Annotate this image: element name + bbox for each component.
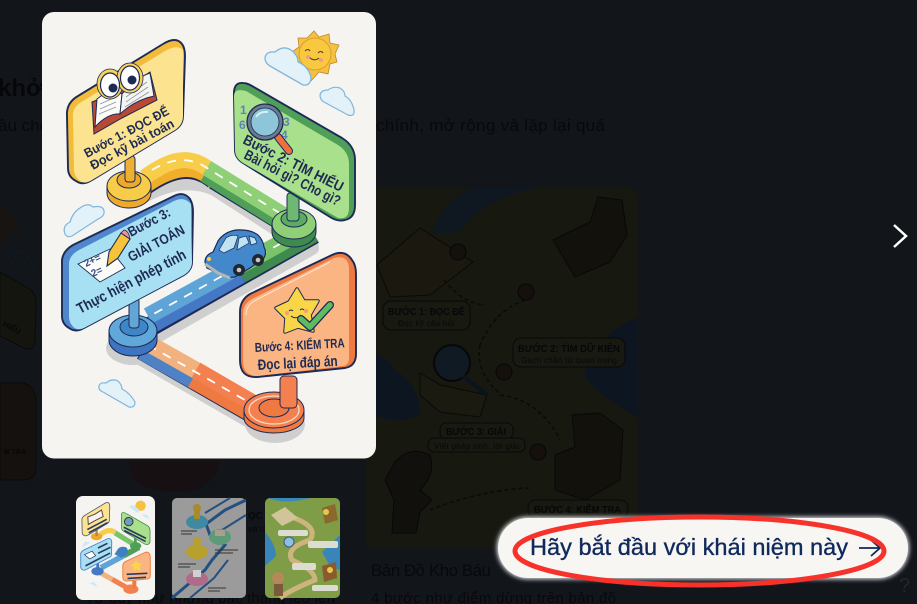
dimmed character behind thumbnails	[128, 462, 220, 492]
icon: button arrow	[859, 540, 880, 556]
sign text: step 2: Bài hỏi gì? Cho gì?	[241, 147, 343, 210]
sign text: step 4	[254, 335, 346, 374]
sign text: step 3: Thực hiện phép tính	[74, 246, 189, 318]
thumbnail: road with podiums	[172, 498, 246, 598]
dimmed neighbouring slide at left: HIỂU	[1, 320, 22, 336]
icon: open book with eyes	[92, 63, 157, 134]
icon: magnifier with numbers: 1	[240, 103, 247, 117]
map label: step 3: Viết phép tính, lời giải	[434, 442, 519, 451]
map label: step 4	[528, 500, 628, 518]
call to action button	[497, 517, 909, 585]
sign text: step 1: Đọc kỹ bài toán	[87, 116, 177, 173]
road shadow	[106, 182, 312, 443]
button label: Hãy bắt đầu với khái niệm này	[530, 534, 849, 560]
icon: magnifier with numbers: 3	[283, 115, 290, 129]
main slide card	[42, 12, 376, 458]
map label: step 2: BƯỚC 2: TÌM DỮ KIỆN	[518, 342, 620, 355]
map label: step 3	[428, 423, 525, 452]
help mark: ?	[899, 575, 910, 597]
base and pole: step 1	[107, 156, 151, 208]
dimmed neighbouring slide at left: M TRA	[4, 449, 26, 456]
icon: cloud top	[265, 48, 311, 85]
dimmed text behind thumbnails: ỌC 1: ĐỌC	[248, 511, 300, 522]
icon: magnifier with numbers: 4	[281, 128, 288, 142]
sign text: step 4: Đọc lại đáp án	[257, 353, 338, 374]
icon: paper and pencil: 2+=	[83, 252, 103, 270]
base and pole: step 2	[272, 193, 316, 247]
icon: star with check	[276, 289, 330, 332]
map label: step 1: BƯỚC 1: ĐỌC ĐỀ	[388, 305, 465, 318]
base and pole: step 4	[244, 376, 304, 433]
icon: blue car	[205, 230, 266, 278]
sign text: step 1: Bước 1: ĐỌC ĐỂ	[81, 103, 172, 161]
sign: step 3	[62, 194, 193, 330]
thumbnail: active isometric road	[76, 496, 155, 600]
dimmed page heading	[0, 75, 606, 135]
sign text: step 3: GIẢI TOÁN	[125, 221, 187, 265]
base and pole: step 3	[109, 298, 157, 356]
sign: step 4	[240, 253, 356, 377]
sign: step 1	[67, 40, 185, 183]
road: step 1 to 2	[145, 160, 292, 228]
sign text: step 3: Bước 3:	[125, 204, 173, 240]
dimmed card caption	[371, 561, 616, 604]
map label: step 2	[513, 338, 625, 367]
red highlight ellipse	[515, 517, 884, 585]
dimmed text behind thumbnails: và rõ ràng	[248, 524, 289, 534]
dimmed neighbouring slide at left	[0, 205, 36, 480]
dimmed treasure map slide	[366, 188, 637, 548]
map label: step 4: BƯỚC 4: KIỂM TRA	[534, 503, 621, 516]
map label: step 3: BƯỚC 3: GIẢI	[446, 425, 506, 438]
road: step 3 to 4	[142, 342, 258, 416]
icon: magnifier with numbers: 6	[239, 118, 246, 132]
icon: cloud bottom	[99, 380, 135, 407]
map label: step 2: Gạch chân từ quan trọng	[521, 356, 617, 365]
sign text: step 4: Bước 4: KIỂM TRA	[254, 335, 346, 355]
icon: cloud left	[64, 205, 104, 237]
icon: sun	[292, 31, 339, 81]
sign text: step 2: Bước 2: TÌM HIỂU	[240, 130, 347, 196]
dimmed page heading: chính, mở rộng và lặp lại quá	[376, 116, 606, 135]
dimmed text behind thumbnails	[85, 511, 335, 604]
dimmed card caption: Bản Đồ Kho Báu	[371, 561, 491, 580]
icon: paper and pencil: 2=	[90, 265, 105, 280]
map label: step 1	[383, 301, 470, 330]
icon: paper and pencil	[78, 230, 130, 282]
map label: step 1: Đọc kỹ câu hỏi	[398, 319, 454, 328]
icon: cloud right	[320, 87, 354, 115]
icon: next chevron	[894, 225, 906, 247]
road: step 2 to 3	[148, 228, 314, 328]
thumbnail: treasure map	[265, 498, 340, 598]
sign text: step 3	[74, 204, 189, 318]
icon: magnifier with numbers	[239, 103, 290, 151]
sign: step 2	[234, 83, 355, 221]
